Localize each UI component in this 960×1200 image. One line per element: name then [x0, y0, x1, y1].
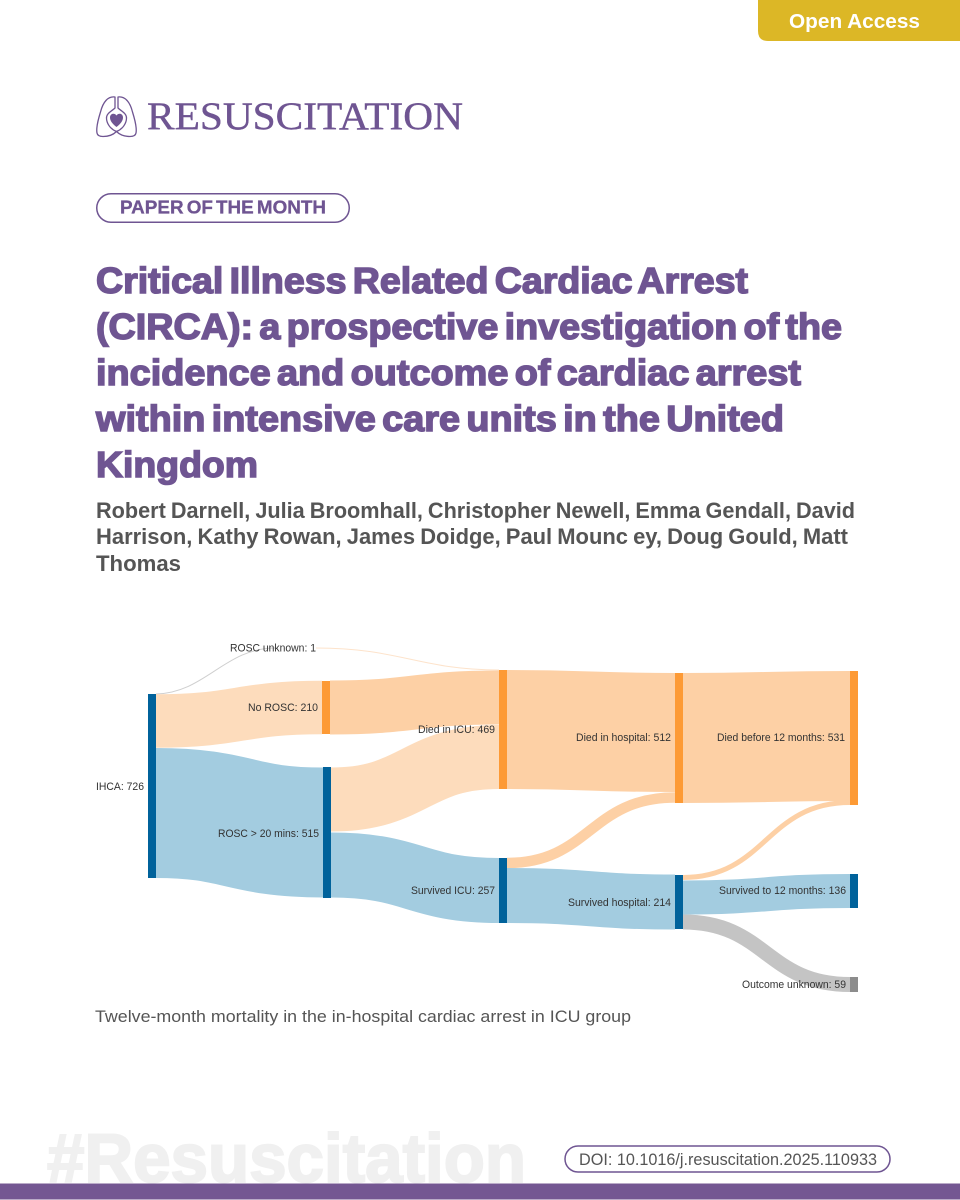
node labels: Died before 12 months: 531 [717, 732, 845, 744]
watermark hashtag: #Resuscitation [47, 1120, 526, 1197]
title: Critical Illness Related Cardiac Arrest [96, 260, 748, 301]
node labels: Outcome unknown: 59 [742, 979, 846, 991]
flow: Died in hospital to Died before 12 months [683, 736, 850, 738]
flow: ROSC to Survived ICU [331, 865, 499, 890]
title: within intensive care units in the United [95, 398, 784, 439]
flow: Survived ICU to Died in hospital [507, 798, 675, 863]
logo: Resuscitation: RESUSCITATION [147, 94, 463, 138]
icon: lungs with heart [97, 97, 136, 136]
title [95, 260, 842, 485]
flow: Survived hospital to Died before 12 months [683, 802, 850, 878]
node labels: Survived to 12 months: 136 [719, 885, 846, 897]
node labels: No ROSC: 210 [248, 702, 318, 714]
flow: Died in ICU to Died in hospital [507, 730, 675, 732]
authors [96, 498, 855, 576]
tag: paper of the month [97, 194, 349, 222]
flow: IHCA to ROSC unknown [156, 648, 275, 694]
DOI pill [565, 1146, 890, 1172]
nodes [148, 670, 858, 992]
node labels: IHCA: 726 [96, 781, 144, 793]
authors: Thomas [96, 551, 181, 576]
node labels: Died in ICU: 469 [418, 724, 495, 736]
chart: sankey diagram of outcomes [96, 642, 858, 992]
flow: Survived ICU to Survived hospital [507, 896, 675, 902]
node labels: ROSC > 20 mins: 515 [218, 828, 319, 840]
node labels: ROSC unknown: 1 [230, 642, 316, 654]
title: incidence and outcome of cardiac arrest [96, 352, 801, 393]
flow: ROSC unknown to Died in ICU [316, 648, 499, 670]
title: Kingdom [96, 444, 258, 485]
node labels [96, 642, 846, 991]
authors: Harrison, Kathy Rowan, James Doidge, Paul Mounc ey, Doug Gould, Matt [96, 524, 849, 549]
badge: open access [758, 0, 960, 41]
node labels: Died in hospital: 512 [576, 732, 671, 744]
title: (CIRCA): a prospective investigation of the [96, 306, 842, 347]
flow: IHCA to No ROSC [156, 708, 322, 721]
footer bar [0, 1184, 960, 1200]
authors: Robert Darnell, Julia Broomhall, Christopher Newell, Emma Gendall, David [96, 498, 855, 523]
flow: Survived hospital to Outcome unknown [683, 922, 850, 984]
flow: Survived hospital to Survived to 12 months [683, 891, 850, 898]
tag: paper of the month: PAPER OF THE MONTH [120, 198, 326, 218]
flow: ROSC to Died in ICU [331, 757, 499, 800]
DOI pill: DOI: 10.1016/j.resuscitation.2025.110933 [579, 1150, 877, 1169]
node labels: Survived ICU: 257 [411, 885, 495, 897]
node labels: Survived hospital: 214 [568, 897, 671, 909]
badge: open access: Open Access [789, 11, 920, 33]
flow: IHCA to ROSC > 20 mins [156, 813, 323, 832]
caption: Twelve-month mortality in the in-hospital cardiac arrest in ICU group [95, 1008, 631, 1026]
flow: No ROSC to Died in ICU [330, 698, 499, 708]
